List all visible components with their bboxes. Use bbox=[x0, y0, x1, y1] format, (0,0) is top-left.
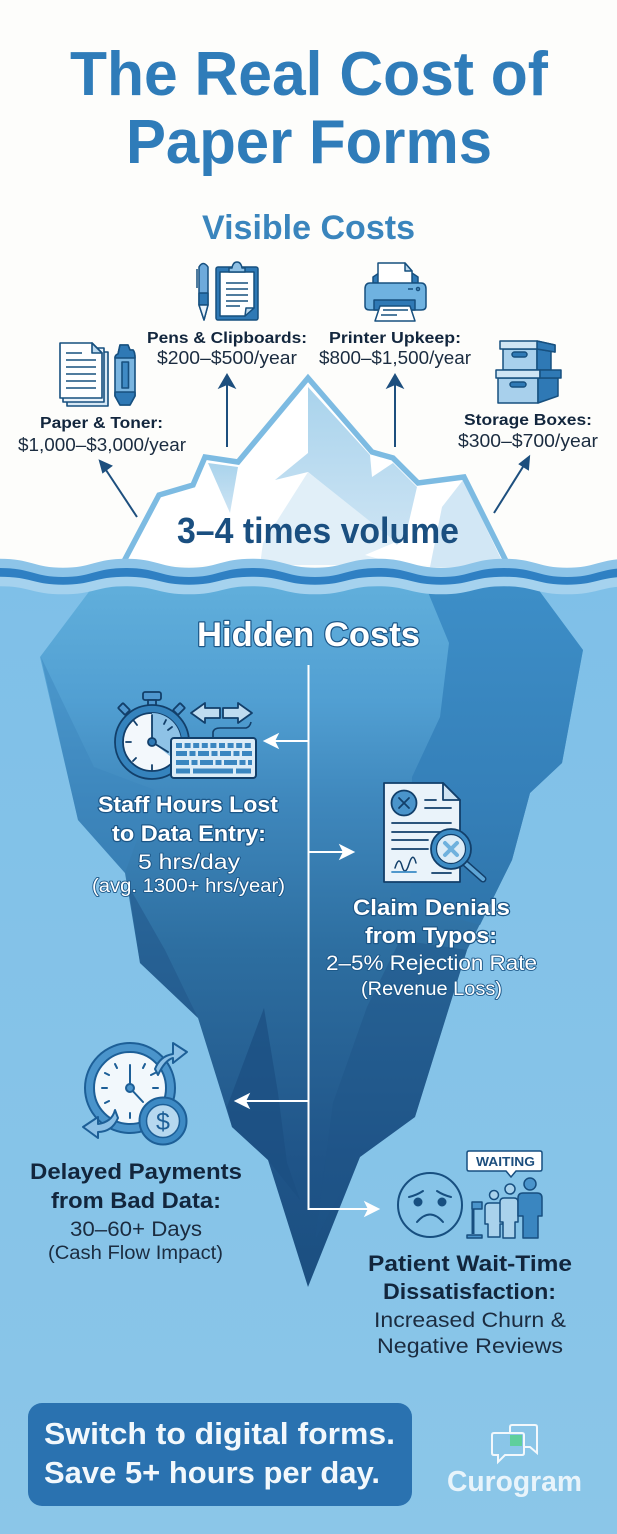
icon: pen bbox=[197, 264, 208, 320]
title: Paper Forms bbox=[126, 108, 492, 177]
label: patient wait time: Patient Wait-Time bbox=[368, 1251, 572, 1276]
logo: curogram bbox=[447, 1425, 582, 1498]
icon: stopwatch bbox=[115, 692, 189, 779]
icon: magnifier bbox=[431, 829, 483, 879]
label: printer upkeep bbox=[319, 330, 471, 368]
icon: waiting bubble: WAITING bbox=[476, 1154, 535, 1169]
waves bbox=[0, 564, 617, 590]
heading: visible costs: Visible Costs bbox=[202, 209, 415, 247]
label: patient wait time bbox=[368, 1251, 572, 1358]
icon: sad face bbox=[398, 1173, 462, 1237]
label: claim denials bbox=[326, 895, 537, 1000]
icon: people in line bbox=[467, 1178, 542, 1238]
label: staff hours: to Data Entry: bbox=[112, 821, 266, 846]
callout: switch to digital bbox=[28, 1403, 412, 1506]
label: staff hours bbox=[92, 792, 285, 897]
title: The Real Cost of bbox=[70, 40, 548, 109]
label: paper and toner bbox=[18, 415, 186, 455]
label: staff hours: Staff Hours Lost bbox=[98, 792, 279, 817]
label: claim denials: 2–5% Rejection Rate bbox=[326, 952, 537, 975]
label: delayed payments: (Cash Flow Impact) bbox=[48, 1243, 223, 1264]
icon: keyboard bbox=[171, 722, 256, 778]
icon: toner cartridge bbox=[115, 345, 135, 405]
callout: switch to digital: Save 5+ hours per day. bbox=[44, 1455, 380, 1490]
icon: waiting bubble bbox=[467, 1151, 542, 1177]
label: patient wait time: Increased Churn & bbox=[374, 1308, 566, 1332]
connector arrows: hidden costs bbox=[236, 665, 378, 1215]
label: delayed payments: 30–60+ Days bbox=[70, 1218, 202, 1241]
label: paper and toner: $1,000–$3,000/year bbox=[18, 435, 186, 455]
icon: claim document bbox=[384, 783, 460, 882]
heading: hidden costs: Hidden Costs bbox=[197, 616, 420, 654]
label: delayed payments bbox=[30, 1159, 242, 1264]
label: paper and toner: Paper & Toner: bbox=[40, 415, 163, 432]
title bbox=[70, 40, 548, 177]
label: delayed payments: Delayed Payments bbox=[30, 1159, 242, 1184]
icon: dollar coin: $ bbox=[156, 1108, 170, 1136]
label: patient wait time: Dissatisfaction: bbox=[383, 1279, 556, 1304]
callout: switch to digital: Switch to digital forms. bbox=[44, 1416, 395, 1451]
label: claim denials: from Typos: bbox=[365, 923, 497, 948]
icon: clipboard bbox=[216, 262, 258, 320]
iceberg tip bbox=[122, 378, 508, 567]
label: pens and clipboards: Pens & Clipboards: bbox=[147, 330, 307, 347]
submerged iceberg bbox=[40, 585, 583, 1287]
icon: delayed clock bbox=[83, 1043, 187, 1138]
label: pens and clipboards bbox=[147, 330, 307, 368]
label: patient wait time: Negative Reviews bbox=[377, 1334, 563, 1358]
label: storage boxes: Storage Boxes: bbox=[464, 412, 592, 429]
label: printer upkeep: Printer Upkeep: bbox=[329, 330, 461, 347]
logo: curogram: Curogram bbox=[447, 1466, 582, 1498]
label: printer upkeep: $800–$1,500/year bbox=[319, 348, 471, 368]
label: delayed payments: from Bad Data: bbox=[51, 1188, 221, 1213]
label: claim denials: Claim Denials bbox=[353, 895, 510, 920]
label: claim denials: (Revenue Loss) bbox=[361, 979, 502, 1000]
icon: dollar coin bbox=[140, 1098, 186, 1144]
label: pens and clipboards: $200–$500/year bbox=[157, 348, 297, 368]
icon: double arrow bbox=[191, 703, 252, 723]
label: staff hours: (avg. 1300+ hrs/year) bbox=[92, 876, 285, 897]
arrows: visible costs bbox=[100, 375, 529, 517]
icon: printer bbox=[365, 263, 426, 321]
label: volume: 3–4 times volume bbox=[177, 510, 459, 551]
icon: paper stack bbox=[60, 343, 108, 406]
label: storage boxes: $300–$700/year bbox=[458, 431, 598, 451]
water body bbox=[0, 575, 617, 1534]
label: staff hours: 5 hrs/day bbox=[138, 851, 241, 874]
icon: storage boxes bbox=[496, 341, 561, 403]
background: sky bbox=[0, 0, 617, 575]
label: storage boxes bbox=[458, 412, 598, 451]
